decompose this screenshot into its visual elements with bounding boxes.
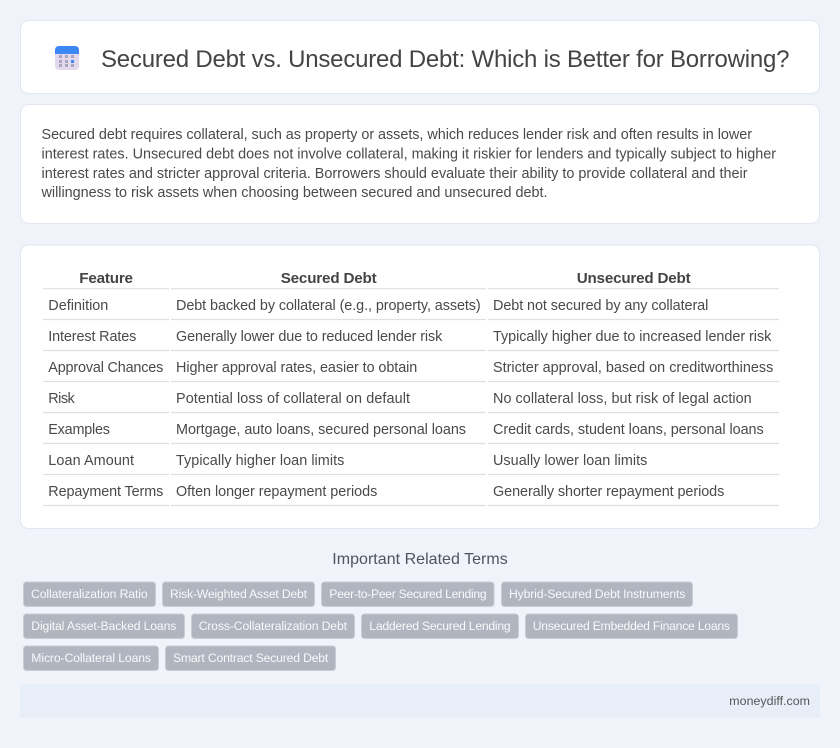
row: repayment terms: Generally shorter repayment periods — [493, 484, 724, 500]
row: loan amount: Loan Amount — [48, 453, 134, 469]
intro paragraph: willingness to risk assets when choosing between secured and unsecured debt. — [40, 185, 548, 201]
row: risk — [43, 391, 779, 412]
row: approval chances — [43, 360, 779, 382]
tag: Hybrid-Secured Debt Instruments — [509, 587, 685, 601]
icon: calendar — [55, 46, 79, 70]
tag — [362, 614, 518, 638]
panel: introduction — [20, 104, 820, 224]
tag: Digital Asset-Backed Loans — [31, 619, 176, 633]
row: repayment terms: Often longer repayment periods — [176, 484, 377, 500]
footer bar — [20, 684, 820, 718]
tag: Laddered Secured Lending — [369, 619, 511, 633]
tag — [502, 582, 692, 606]
panel: header — [20, 20, 820, 94]
row: repayment terms: Repayment Terms — [48, 484, 163, 500]
row: interest rates: Typically higher due to increased lender risk — [493, 329, 772, 345]
tag: Cross-Collateralization Debt — [199, 619, 348, 633]
tag — [166, 646, 336, 670]
row: loan amount — [43, 453, 779, 474]
tag: Unsecured Embedded Finance Loans — [533, 619, 730, 633]
panel: comparison table — [20, 245, 820, 528]
row: examples: Credit cards, student loans, personal loans — [493, 422, 764, 438]
tag: Micro-Collateral Loans — [31, 651, 151, 665]
row: interest rates — [43, 329, 779, 350]
intro paragraph — [40, 127, 776, 201]
row: approval chances: Approval Chances — [48, 360, 163, 376]
tag: Risk-Weighted Asset Debt — [170, 587, 308, 601]
row: definition: Debt not secured by any collateral — [493, 298, 708, 314]
row: examples — [43, 422, 779, 444]
tag — [24, 582, 156, 606]
tag — [24, 614, 184, 638]
row: interest rates: Interest Rates — [48, 329, 136, 345]
intro paragraph: Secured debt requires collateral, such as property or assets, which reduces lender risk and often results in lower — [42, 127, 752, 143]
tag: Peer-to-Peer Secured Lending — [329, 587, 487, 601]
intro paragraph: interest rates. Unsecured debt does not involve collateral, making it riskier for lenders and typically subject to higher — [42, 146, 776, 162]
row: approval chances: Stricter approval, based on creditworthiness — [493, 360, 773, 376]
table header row: Unsecured Debt — [577, 270, 691, 287]
row: definition: Debt backed by collateral (e.g., property, assets) — [176, 298, 481, 314]
row: repayment terms — [43, 484, 779, 506]
row: risk: Risk — [48, 391, 75, 407]
row: approval chances: Higher approval rates, easier to obtain — [176, 360, 417, 376]
row: risk: Potential loss of collateral on default — [176, 391, 410, 407]
tag — [322, 582, 494, 606]
tag — [526, 614, 738, 638]
row: loan amount: Usually lower loan limits — [493, 453, 647, 469]
tag group: related terms — [24, 582, 738, 670]
row: examples: Mortgage, auto loans, secured personal loans — [176, 422, 466, 438]
table header row: Secured Debt — [281, 270, 377, 287]
tag: Smart Contract Secured Debt — [173, 651, 329, 665]
footer source: moneydiff.com — [729, 694, 810, 708]
heading: important related terms: Important Related Terms — [332, 551, 508, 568]
row: definition: Definition — [48, 298, 108, 314]
tag — [24, 646, 158, 670]
table header row — [43, 270, 779, 289]
row: loan amount: Typically higher loan limits — [176, 453, 344, 469]
row: risk: No collateral loss, but risk of legal action — [493, 391, 752, 407]
table header row: Feature — [79, 270, 133, 287]
row: examples: Examples — [48, 422, 110, 438]
tag — [162, 582, 314, 606]
tag — [192, 614, 354, 638]
intro paragraph: interest rates and stricter approval criteria. Borrowers should evaluate their ability to provide collateral and their — [42, 166, 748, 182]
tag: Collateralization Ratio — [31, 587, 148, 601]
title: Secured Debt vs. Unsecured Debt: Which is Better for Borrowing? — [101, 46, 790, 73]
row: interest rates: Generally lower due to reduced lender risk — [176, 329, 443, 345]
row: definition — [43, 298, 779, 320]
